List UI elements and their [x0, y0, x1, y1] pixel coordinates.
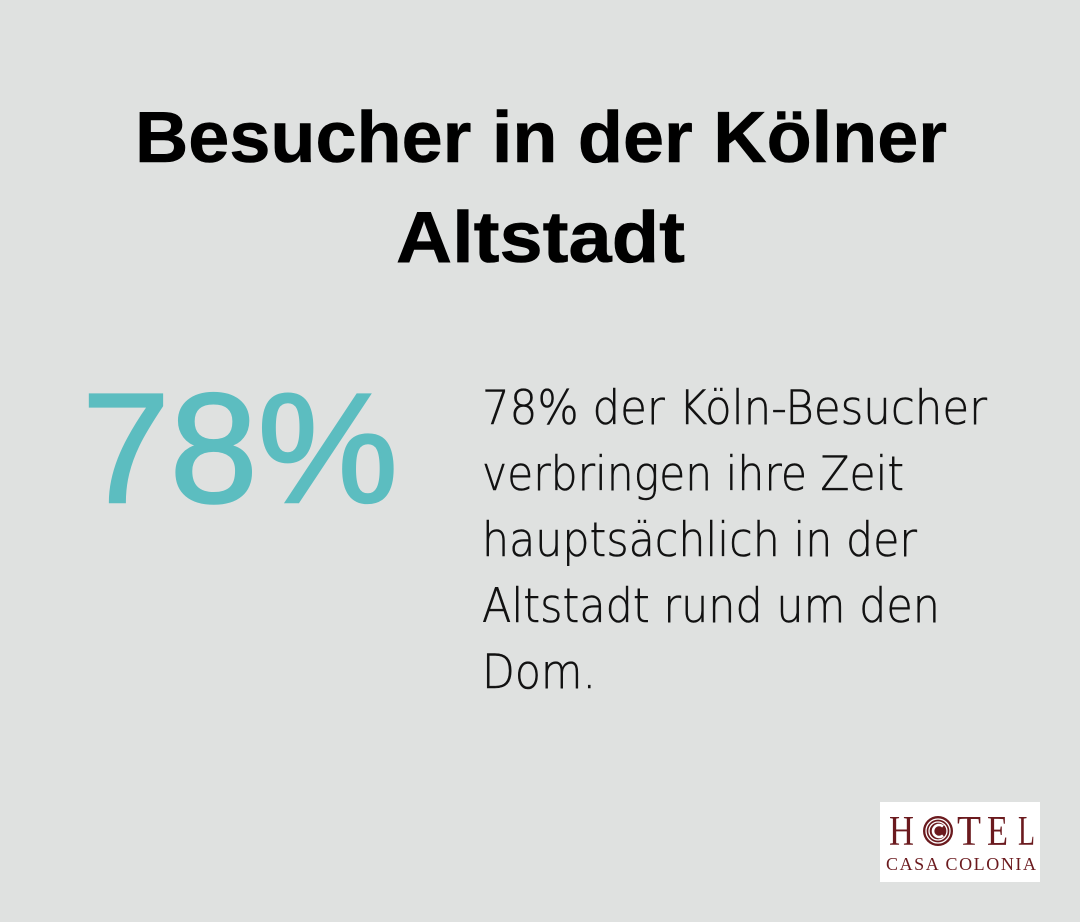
logo wordmark: E: [987, 809, 1008, 855]
logo wordmark: H: [889, 809, 914, 855]
big statistic: 78%: [82, 362, 398, 536]
logo wordmark: L: [1018, 809, 1035, 855]
logo wordmark: [889, 809, 1035, 855]
description text: 78% der Köln-Besucher: [482, 381, 988, 436]
title: [135, 98, 947, 278]
description text: verbringen ihre Zeit: [482, 447, 904, 502]
logo subtitle: CASA COLONIA: [886, 854, 1036, 874]
logo emblem: [923, 816, 953, 846]
logo: Hotel Casa Colonia: [880, 802, 1040, 882]
logo wordmark: T: [957, 809, 981, 855]
description text: hauptsächlich in der: [482, 513, 918, 568]
title: Altstadt: [396, 198, 685, 278]
title: Besucher in der Kölner: [135, 98, 947, 178]
description text: Dom.: [482, 645, 596, 700]
description text: Altstadt rund um den: [482, 579, 940, 634]
description text: [482, 381, 988, 700]
